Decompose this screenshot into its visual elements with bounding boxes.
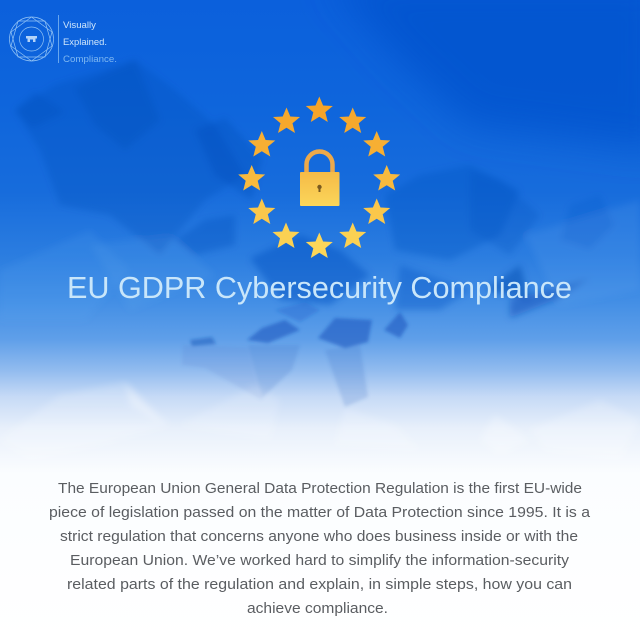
logo wordmark: Explained. <box>63 37 107 48</box>
intro paragraph <box>49 481 591 617</box>
EU star circle with padlock <box>238 96 400 258</box>
icon: ring of twelve stars <box>238 96 400 258</box>
intro paragraph: achieve compliance. <box>247 601 388 617</box>
intro paragraph: European Union. We’ve worked hard to simplify the information-security <box>70 553 570 569</box>
icon: padlock <box>300 152 340 206</box>
intro paragraph: piece of legislation passed on the matter of Data Protection since 1995. It is a <box>49 505 591 521</box>
intro paragraph: related parts of the regulation and explain, in simple steps, how you can <box>67 577 572 593</box>
intro paragraph: strict regulation that concerns anyone who does business inside or with the <box>60 529 578 545</box>
logo wordmark: Compliance. <box>63 54 117 65</box>
low-poly mountain background <box>0 0 640 460</box>
logo wordmark: Visually <box>63 20 96 31</box>
brand logo <box>10 15 117 65</box>
logo wordmark <box>63 20 117 65</box>
icon: geometric emblem <box>10 17 54 61</box>
logo divider <box>57 15 60 63</box>
intro paragraph: The European Union General Data Protection Regulation is the first EU-wide <box>58 481 582 497</box>
title: EU GDPR Cybersecurity Compliance <box>67 270 572 305</box>
